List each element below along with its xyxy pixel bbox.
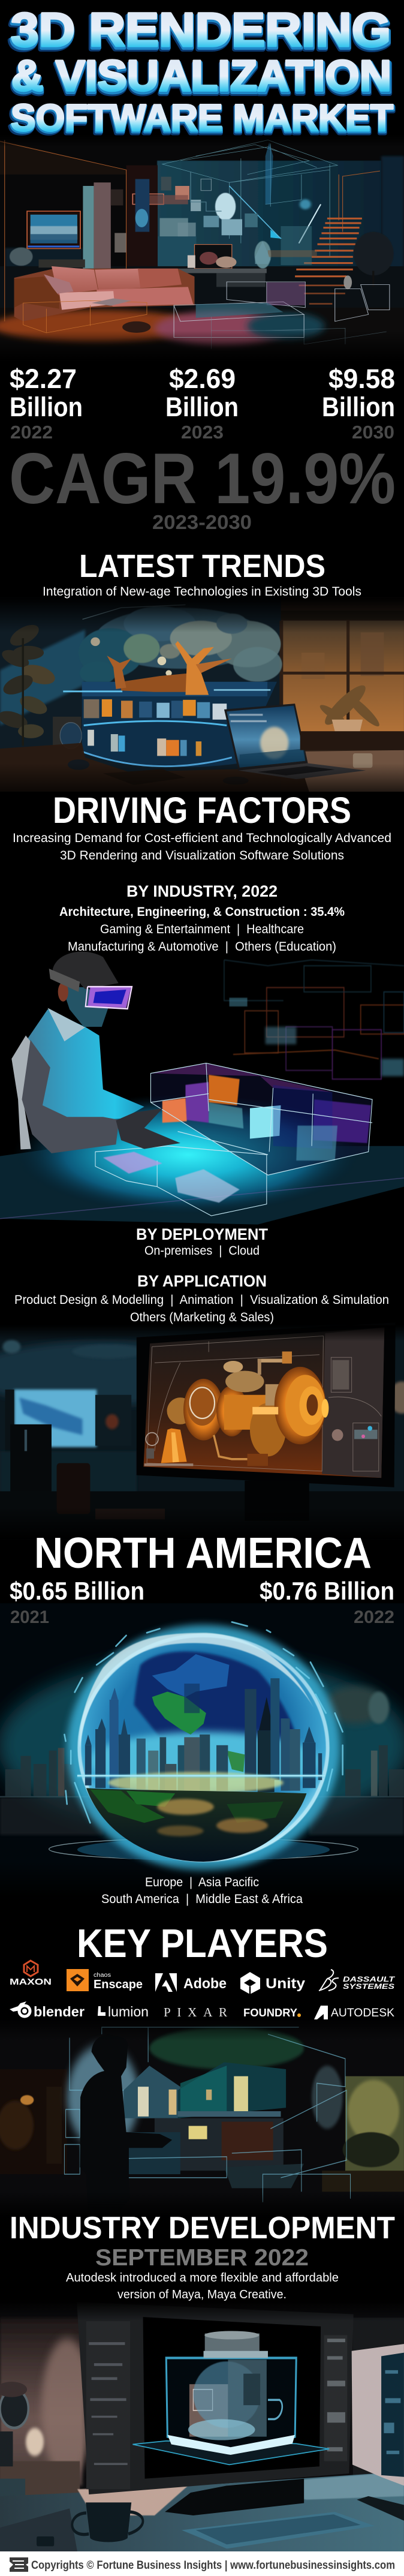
coffee mug (37, 2502, 143, 2546)
background wireframe (224, 960, 404, 1079)
image: tree hologram and laptop (0, 597, 404, 792)
lower earth hemisphere (86, 1788, 306, 1862)
logo: dassault systemes: DASSAULT (343, 1975, 396, 1983)
title: SOFTWARE MARKET (11, 97, 393, 139)
panel: market size statistics (9, 363, 396, 533)
development description: version of Maya, Maya Creative. (117, 2288, 287, 2301)
wireframe ceiling (162, 140, 337, 257)
man silhouette (80, 2035, 172, 2209)
heading: industry development: INDUSTRY DEVELOPMENT (10, 2211, 395, 2246)
wireframes (64, 2027, 351, 2202)
development date: SEPTEMBER 2022 (95, 2245, 309, 2271)
title (9, 3, 394, 142)
heading: north america: NORTH AMERICA (34, 1529, 372, 1577)
right device (352, 2344, 404, 2485)
development description (66, 2271, 339, 2301)
glass stair steps (295, 218, 362, 305)
monitor (137, 1322, 396, 1487)
stat: 2030: $9.58 (328, 363, 395, 394)
sphere (77, 1633, 329, 1862)
continents (152, 1692, 206, 1735)
other regions: Europe | Asia Pacific (145, 1875, 259, 1889)
stat: 2023: $2.69 (169, 363, 236, 394)
by deployment: BY DEPLOYMENT (136, 1225, 268, 1243)
other regions (101, 1875, 303, 1906)
tree hologram (255, 241, 270, 264)
by industry segment (59, 882, 345, 954)
value 2021: $0.65 Billion (10, 1577, 144, 1605)
table glow (0, 1146, 404, 1225)
logo: enscape (67, 1969, 143, 1991)
holographic mug (132, 2331, 329, 2464)
plant (354, 232, 394, 275)
value 2022: 2022 (354, 1607, 394, 1627)
title: & VISUALIZATION (11, 52, 391, 100)
desk (0, 743, 404, 792)
panel: key players (10, 1921, 396, 2019)
title: & VISUALIZATION (11, 55, 393, 103)
logo: unity: Unity (266, 1976, 306, 1992)
heading: latest trends (43, 548, 361, 599)
image: globe with city skyline (0, 1603, 404, 1898)
value 2022 (260, 1577, 394, 1627)
television (27, 211, 80, 248)
towers (85, 1678, 322, 1792)
title: SOFTWARE MARKET (10, 98, 394, 140)
logo: unity (240, 1972, 306, 1994)
logo: dassault systemes (319, 1970, 396, 1991)
by industry segment: Gaming & Entertainment | Healthcare (100, 922, 304, 936)
title: & VISUALIZATION (11, 54, 393, 102)
platform rings (49, 1838, 358, 1860)
logo: adobe (155, 1973, 227, 1992)
stat: 2022: 2022 (10, 422, 53, 443)
engine (161, 1351, 328, 1466)
image: man with holographic house (0, 2020, 404, 2216)
by deployment (136, 1225, 268, 1258)
plant left (0, 621, 57, 746)
potted plant and mug (318, 680, 382, 730)
title: 3D RENDERING (11, 3, 391, 56)
shelf and vase (10, 248, 33, 266)
panel: north america (10, 1529, 394, 1906)
tree trunks (107, 641, 232, 695)
logo: lumion: lumion (108, 2004, 149, 2019)
by industry segment: Manufacturing & Automotive | Others (Education) (68, 940, 336, 954)
monitor (77, 2302, 354, 2494)
image: monitor with holographic mug (0, 2300, 404, 2551)
stat: 2030: Billion (322, 392, 395, 422)
by application: Others (Marketing & Sales) (130, 1310, 274, 1324)
title: 3D RENDERING (10, 5, 392, 58)
desk (0, 2472, 404, 2551)
keyboard (182, 2512, 375, 2548)
development description: Autodesk introduced a more flexible and affordable (66, 2271, 339, 2285)
heading: key players: KEY PLAYERS (77, 1921, 328, 1966)
orbital dashes (64, 1622, 343, 1823)
driving factor description: Increasing Demand for Cost-efficient and Technologically Advanced (13, 831, 391, 845)
logo: pixar: PIXAR (164, 2005, 227, 2019)
logo: maxon (10, 1961, 52, 1987)
logo: foundry: FOUNDRY (243, 2007, 297, 2019)
laptop (224, 704, 308, 771)
panel: industry development (10, 2211, 395, 2301)
tree canopy (79, 606, 282, 685)
logo: blender: blender (34, 2004, 85, 2019)
logo: blender (10, 2001, 85, 2019)
person (11, 952, 180, 1153)
by deployment: On-premises | Cloud (144, 1244, 260, 1258)
title: 3D RENDERING (9, 6, 391, 59)
sofa (14, 269, 194, 321)
hologram cluster (132, 172, 258, 236)
trend description: Integration of New-age Technologies in Existing 3D Tools (43, 585, 361, 599)
stat: 2030: 2030 (352, 422, 394, 443)
by application: BY APPLICATION (137, 1272, 267, 1290)
by industry segment: Architecture, Engineering, & Construction : 35.4% (59, 905, 345, 919)
orange lines (0, 140, 380, 321)
other regions: South America | Middle East & Africa (101, 1892, 303, 1906)
driving factor description (13, 831, 391, 862)
footer (0, 2551, 404, 2576)
distant skyline (5, 1745, 404, 1796)
driving factor description: 3D Rendering and Visualization Software Solutions (60, 849, 344, 862)
CAGR period: 2023-2030 (152, 511, 252, 533)
value 2021 (10, 1577, 144, 1627)
stat: 2023: Billion (165, 392, 239, 422)
stat: 2022 (10, 363, 83, 443)
value 2021: 2021 (10, 1607, 49, 1627)
house (123, 2062, 304, 2188)
desk with monitor (194, 245, 232, 269)
by application (14, 1272, 389, 1324)
camera (0, 2382, 28, 2526)
floor wireframe (211, 317, 387, 349)
logo: dassault systemes: SYSTEMES (343, 1982, 394, 1991)
curtains (83, 186, 94, 269)
value 2022: $0.76 Billion (260, 1577, 394, 1605)
logo: enscape: chaos (94, 1972, 111, 1979)
panel: deployment and application segments (14, 1225, 389, 1324)
stat: 2030 (322, 363, 395, 443)
heading: latest trends: LATEST TRENDS (79, 548, 325, 584)
image: monitor showing engine model (0, 1322, 404, 1540)
hero image: holographic living room (0, 136, 404, 360)
logo: maxon: MAXON (10, 1977, 52, 1987)
logo: adobe: Adobe (183, 1976, 227, 1992)
by industry segment: BY INDUSTRY, 2022 (126, 882, 278, 900)
image: VR designer with holographic building (0, 951, 404, 1236)
heading: driving factors: DRIVING FACTORS (53, 790, 351, 831)
holographic building (95, 1063, 372, 1216)
stat: 2022: Billion (10, 392, 83, 422)
by application: Product Design & Modelling | Animation | Visualization & Simulation (14, 1293, 389, 1307)
glass cubes (174, 282, 390, 338)
logo: enscape: Enscape (94, 1978, 143, 1991)
panel: driving factors (13, 790, 391, 954)
title: SOFTWARE MARKET (9, 100, 394, 142)
orange coffee table outline (23, 300, 147, 333)
layered holographic cylinder (63, 682, 277, 767)
stat: 2023: 2023 (181, 422, 224, 443)
logo: autodesk: AUTODESK (331, 2007, 394, 2019)
stat: 2023 (165, 363, 239, 443)
logo: fortune business insights (10, 2557, 28, 2572)
stat: 2022: $2.27 (10, 363, 77, 394)
